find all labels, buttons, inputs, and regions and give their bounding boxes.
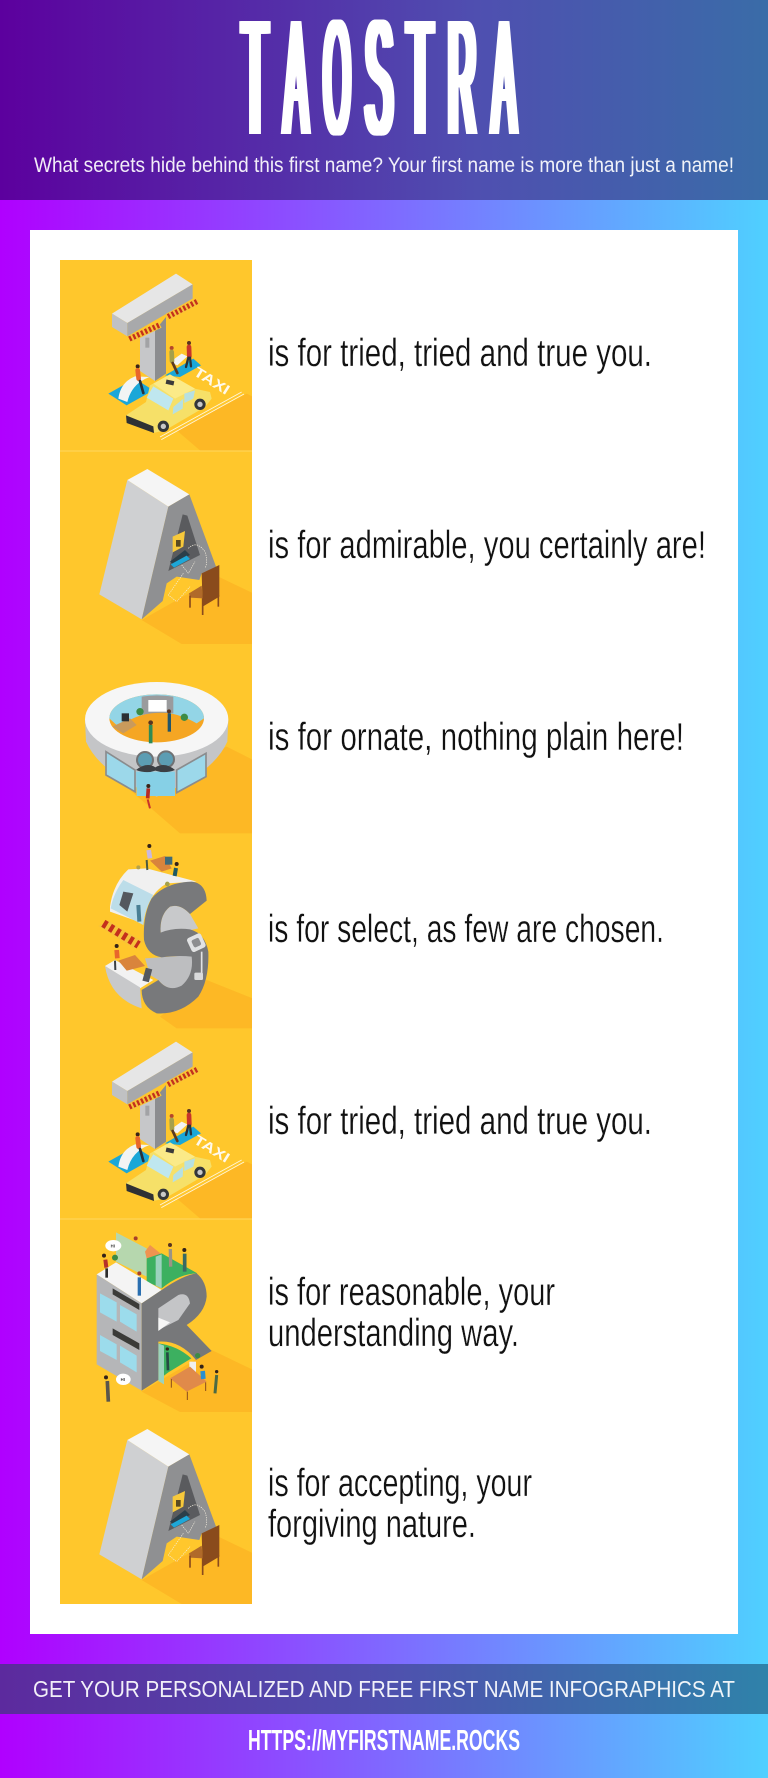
icon: letter O optician shop (85, 682, 253, 833)
footer url: HTTPS://MYFIRSTNAME.ROCKS (248, 1725, 520, 1757)
icon: letter R office building: HI (111, 1243, 115, 1248)
icon: letter T with taxi (108, 274, 257, 450)
text: R meaning: is for reasonable, your (268, 1271, 555, 1314)
panel: yellow illustration column (60, 260, 257, 1604)
icon: letter R office building: HI (121, 1377, 125, 1382)
panel: white card (30, 230, 738, 1634)
text: second A meaning (268, 1462, 532, 1546)
text: R meaning (268, 1271, 555, 1355)
text: second A meaning: is for accepting, your (268, 1462, 532, 1505)
footer band (0, 1664, 768, 1714)
text: second T meaning: is for tried, tried and true you. (268, 1100, 652, 1143)
icon: letter A with chair (99, 469, 257, 644)
text: second A meaning: forgiving nature. (268, 1503, 476, 1546)
header band (0, 0, 768, 200)
text: R meaning: understanding way. (268, 1312, 519, 1355)
icon: letter R office building (97, 1232, 257, 1412)
icon: letter T with taxi repeated (108, 1042, 257, 1218)
text: T meaning: is for tried, tried and true you. (268, 332, 652, 375)
icon: letter S office (98, 844, 257, 1028)
title (239, 0, 520, 169)
icon: letter A with chair repeated (99, 1429, 257, 1604)
